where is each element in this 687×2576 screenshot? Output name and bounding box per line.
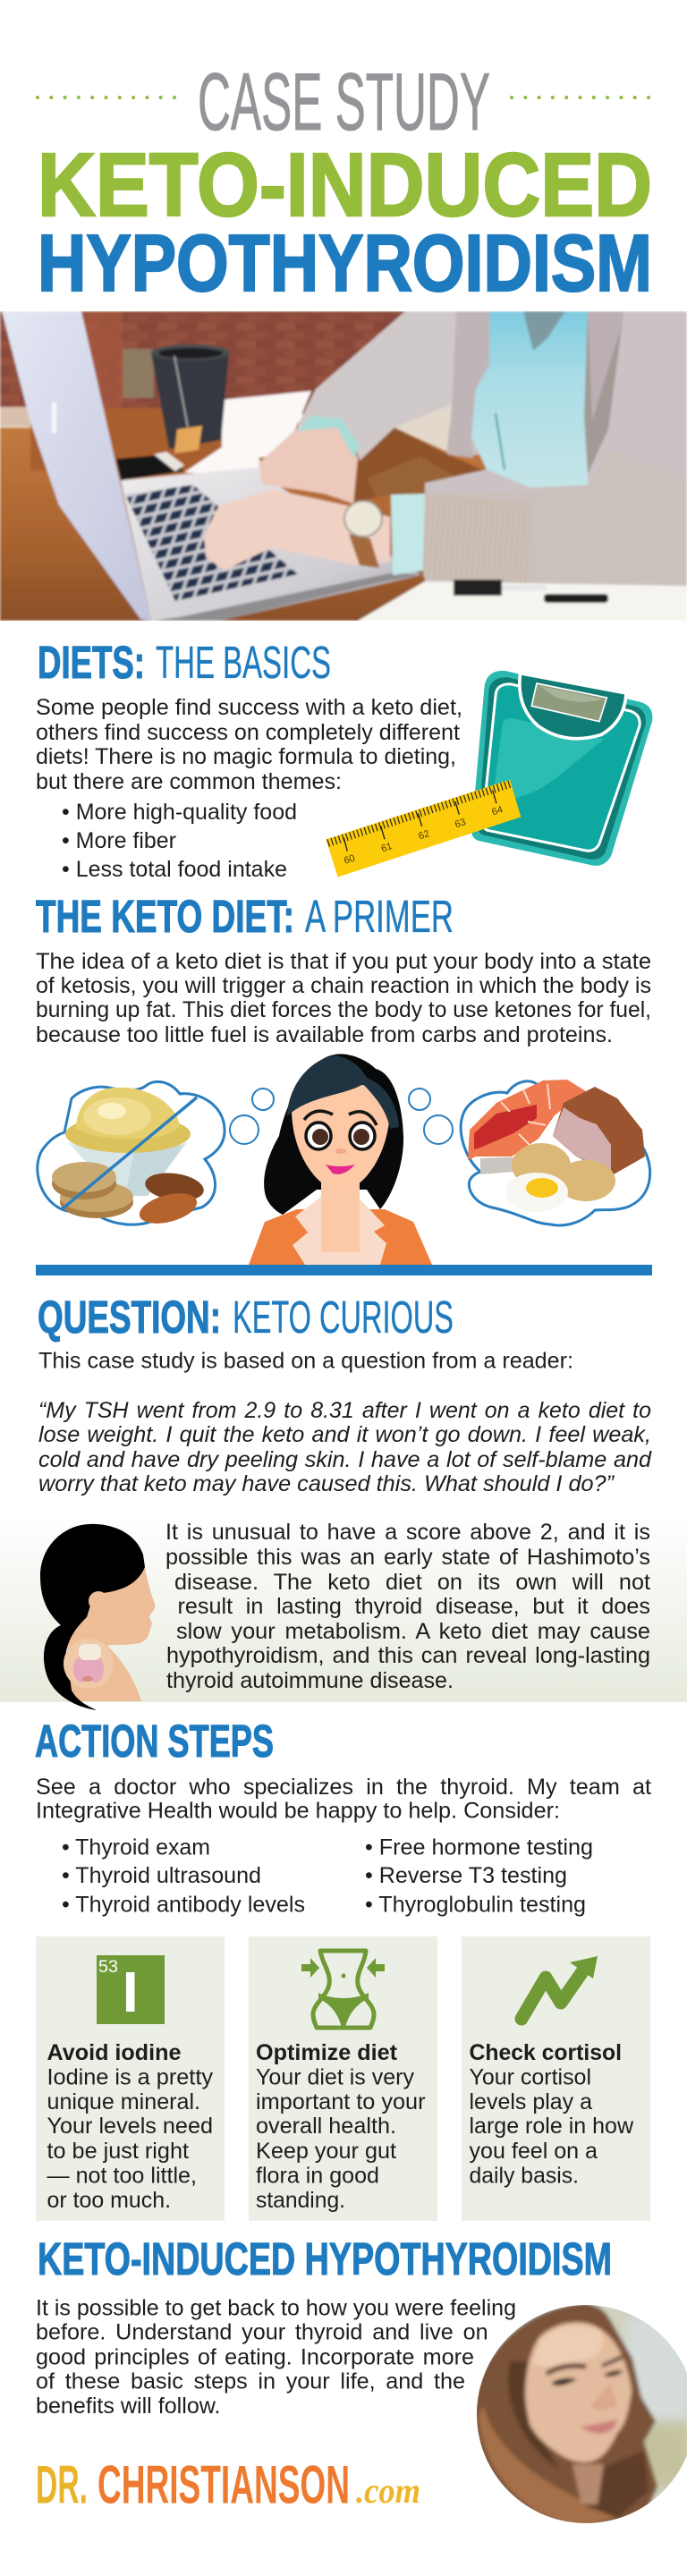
text block: closing: before. Understand your thyroid and live on	[36, 2320, 488, 2345]
hair	[264, 1054, 403, 1215]
card text: daily basis.	[469, 2163, 579, 2188]
hair	[472, 2303, 657, 2527]
list: common diet themes: • Less total food intake	[62, 857, 287, 882]
heading: diets, the basics: THE BASICS	[156, 637, 331, 688]
card text: important to your	[256, 2089, 426, 2114]
panel: optimize diet	[249, 1936, 437, 2221]
card text: standing.	[256, 2188, 345, 2213]
text block: closing: benefits will follow.	[36, 2394, 220, 2419]
scale body	[471, 671, 652, 866]
thought bubbles right	[409, 1089, 453, 1144]
photo: woman typing on a laptop	[0, 311, 687, 621]
text block: diets intro: Some people find success with a keto diet,	[36, 695, 462, 720]
list: tests: • Free hormone testing	[365, 1835, 593, 1860]
eyes	[551, 2378, 577, 2385]
card text: Your diet is very	[256, 2065, 414, 2090]
title	[38, 57, 652, 309]
heading: the keto diet, a primer: THE KETO DIET:	[36, 891, 294, 942]
text block: action steps intro: See a doctor who specializes in the thyroid. My team at	[36, 1775, 651, 1800]
measuring tape: 62	[417, 828, 431, 842]
heading: the keto diet, a primer: A PRIMER	[305, 891, 454, 942]
meat	[553, 1087, 645, 1174]
lips	[326, 1165, 355, 1174]
heading: question, keto curious: KETO CURIOUS	[233, 1292, 454, 1343]
list: tests: • Thyroglobulin testing	[365, 1893, 586, 1918]
watch	[349, 534, 379, 568]
heading: diets, the basics	[38, 637, 331, 688]
text block: closing	[36, 2295, 516, 2419]
quote: reader question: worry that keto may have caused this. What should I do?”	[38, 1471, 615, 1496]
eyebrows	[547, 2366, 586, 2374]
skin	[67, 1567, 155, 1701]
icon: waist with arrows	[301, 1951, 385, 2028]
illustration: thought cloud with salmon, meat and eggs	[461, 1080, 650, 1225]
white table surface	[184, 391, 311, 479]
nose	[592, 2386, 616, 2410]
dotted rule right	[512, 96, 650, 99]
mug	[151, 353, 229, 449]
card text: to be just right	[47, 2139, 189, 2164]
list: common diet themes	[62, 800, 297, 882]
card text: Your levels need	[47, 2114, 213, 2139]
card text: levels play a	[469, 2089, 593, 2114]
card text: or too much.	[47, 2188, 171, 2213]
text block: thyroid explanation: result in lasting thyroid disease, but it does	[177, 1594, 650, 1619]
card text	[256, 2040, 426, 2213]
bread rolls	[143, 1170, 206, 1204]
card text: Check cortisol	[469, 2040, 622, 2065]
heading: action steps: ACTION STEPS	[35, 1716, 274, 1767]
card text: — not too little,	[47, 2163, 197, 2188]
list: exams	[62, 1835, 305, 1918]
text block: diets intro: but there are common themes:	[36, 769, 342, 794]
text block: thyroid explanation: It is unusual to have a score above 2, and it is	[165, 1520, 650, 1545]
quote: reader question: cold and have dry peeling skin. I have a lot of self-blame and	[38, 1447, 652, 1472]
text block: diets intro: diets! There is no magic formula to dieting,	[36, 744, 456, 769]
face	[525, 2322, 632, 2462]
bowl of mash	[64, 1138, 191, 1196]
divider bar	[36, 1265, 652, 1275]
text block: action steps intro: Integrative Health would be happy to help. Consider:	[36, 1799, 560, 1824]
text block: thyroid explanation	[165, 1520, 650, 1693]
measuring tape: 64	[490, 804, 505, 818]
card text: Optimize diet	[256, 2040, 398, 2065]
keys	[125, 485, 298, 601]
wall and wood	[0, 311, 429, 414]
biscuits	[60, 1186, 133, 1218]
card text: flora in good	[256, 2163, 379, 2188]
text block: keto primer: burning up fat. This diet forces the body to use ketones for fuel,	[36, 997, 651, 1022]
text block: keto primer: of ketosis, you will trigger a chain reaction in which the body is	[36, 973, 651, 998]
panel: avoid iodine	[36, 1936, 225, 2221]
panel: check cortisol	[462, 1936, 650, 2221]
list: tests: • Reverse T3 testing	[365, 1863, 567, 1888]
list: common diet themes: • More fiber	[62, 828, 176, 853]
logo: dr christianson: CHRISTIANSON	[98, 2454, 350, 2515]
illustration: woman thinking	[249, 1054, 432, 1265]
list: exams: • Thyroid antibody levels	[62, 1893, 305, 1918]
jacket	[249, 1209, 432, 1265]
list: exams: • Thyroid ultrasound	[62, 1863, 261, 1888]
logo: dr christianson: .com	[356, 2470, 420, 2511]
card text: Avoid iodine	[47, 2040, 181, 2065]
quote: reader question: lose weight. I quit the keto and it won’t go down. I feel weak,	[38, 1422, 651, 1447]
text block: closing: good principles of eating. Incorporate more	[36, 2345, 474, 2370]
icon: woman profile with thyroid gland	[40, 1524, 155, 1710]
icon: bathroom scale with measuring tape	[326, 671, 652, 877]
icon: iodine element tile	[97, 1955, 165, 2024]
text block: keto primer: because too little fuel is available from carbs and proteins.	[36, 1022, 613, 1047]
text block: keto primer: The idea of a keto diet is that if you put your body into a state	[36, 949, 651, 974]
phone	[116, 454, 184, 480]
text block: diets intro	[36, 695, 462, 794]
icon: rising zigzag arrow	[522, 1956, 598, 2019]
logo: dr christianson	[36, 2454, 420, 2515]
nose	[335, 1148, 346, 1154]
measuring tape: 63	[454, 817, 467, 830]
neck	[321, 1176, 360, 1252]
dotted rule left	[38, 96, 176, 99]
laptop lid	[2, 311, 151, 621]
text block: closing: of these basic steps in your life, and the	[36, 2368, 465, 2394]
card text: overall health.	[256, 2114, 396, 2139]
cardigan torso	[425, 311, 687, 590]
thyroid gland	[64, 1639, 114, 1689]
hair	[40, 1524, 145, 1710]
blouse	[293, 1196, 386, 1265]
papers and pen	[358, 581, 687, 621]
panel: thyroid explanation background	[0, 1513, 687, 1702]
card text: Iodine is a pretty	[47, 2065, 213, 2090]
list: tests	[365, 1835, 593, 1918]
icon: iodine element tile: 53	[98, 1958, 118, 1977]
card text: unique mineral.	[47, 2089, 200, 2114]
measuring tape: 60	[343, 853, 356, 867]
text block: keto primer	[36, 949, 651, 1047]
heading: question, keto curious: QUESTION:	[38, 1292, 221, 1343]
measuring tape: 61	[380, 841, 394, 854]
text block: thyroid explanation: thyroid autoimmune disease.	[166, 1668, 454, 1693]
face	[292, 1082, 390, 1191]
card text: you feel on a	[469, 2139, 598, 2164]
text block: closing: It is possible to get back to how you were feeling	[36, 2295, 516, 2320]
fringe	[287, 1055, 399, 1129]
photo: smiling woman portrait	[472, 2303, 687, 2527]
cross-out line	[62, 1097, 197, 1209]
card text: Keep your gut	[256, 2139, 396, 2164]
text block: thyroid explanation: slow your metabolism. A keto diet may cause	[176, 1619, 650, 1644]
text block: diets intro: others find success on completely different	[36, 720, 460, 745]
cuff	[391, 494, 425, 575]
cardigan forearm	[456, 452, 685, 584]
eyebrows	[304, 1111, 333, 1120]
eyes	[306, 1123, 331, 1149]
card text: Your cortisol	[469, 2065, 591, 2090]
blurred background	[499, 2306, 687, 2503]
heading: diets, the basics: DIETS:	[38, 637, 145, 688]
text block: action steps intro	[36, 1775, 651, 1824]
thought bubbles left	[230, 1089, 274, 1144]
measuring tape	[326, 780, 521, 877]
salmon	[480, 1157, 530, 1174]
text block: question intro: This case study is based on a question from a reader:	[38, 1349, 573, 1374]
quote: reader question	[38, 1398, 652, 1496]
laptop base	[121, 467, 421, 621]
text block: thyroid explanation: disease. The keto diet on its own will not	[174, 1570, 650, 1595]
cardigan sleeve	[298, 311, 456, 461]
list: common diet themes: • More high-quality food	[62, 800, 297, 825]
card text: large role in how	[469, 2114, 634, 2139]
lips	[580, 2419, 617, 2434]
shirt	[471, 311, 588, 487]
card text	[47, 2040, 213, 2213]
illustration: thought cloud with crossed-out carbs	[38, 1081, 225, 1229]
quote: reader question: “My TSH went from 2.9 to 8.31 after I went on a keto diet to	[38, 1398, 651, 1423]
text block: thyroid explanation: possible this was an early state of Hashimoto’s	[165, 1545, 650, 1570]
list: exams: • Thyroid exam	[62, 1835, 210, 1860]
eggs	[512, 1143, 571, 1188]
heading: question, keto curious	[38, 1292, 454, 1343]
hands	[259, 428, 358, 504]
logo: dr christianson: DR.	[36, 2454, 88, 2515]
card text	[469, 2040, 634, 2188]
text block: thyroid explanation: hypothyroidism, and this can reveal long-lasting	[166, 1643, 650, 1668]
